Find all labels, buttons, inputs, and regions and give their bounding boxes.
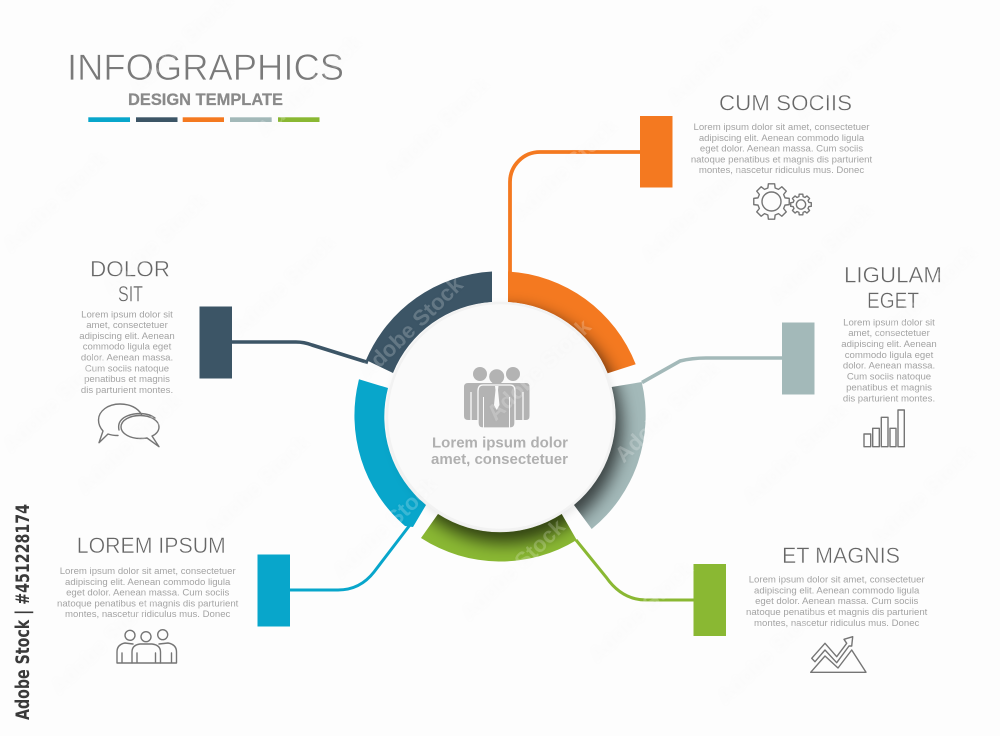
connector: slate (642, 358, 784, 382)
watermark pattern: Adobe Stock (610, 355, 724, 467)
centre text: Lorem ipsum dolor (432, 436, 568, 452)
text block: adipiscing elit. Aenean (79, 331, 175, 342)
watermark pattern: Adobe Stock (738, 397, 852, 509)
panel: lorem ipsum (57, 533, 239, 663)
watermark pattern: Adobe Stock (482, 313, 596, 425)
ring segment: dark (366, 272, 492, 373)
ring segment: orange (508, 272, 636, 373)
text block: Cum sociis natoque (847, 372, 931, 383)
watermark pattern: Adobe Stock (252, 29, 366, 141)
watermark pattern: Adobe Stock (72, 387, 186, 499)
heading: SIT (118, 282, 143, 307)
text block: penatibus et magnis (84, 374, 170, 385)
ring segment: blue (354, 379, 426, 527)
watermark pattern: Adobe Stock (712, 597, 826, 709)
icon: bar chart (864, 410, 904, 447)
text block: adipiscing elit. Aenean commodo ligula (754, 585, 920, 596)
text block (691, 122, 872, 176)
circle shadow on segments (387, 308, 623, 544)
text block: Lorem ipsum dolor sit amet, consectetuer (749, 574, 925, 586)
text block: Lorem ipsum dolor sit amet, consectetuer (60, 566, 236, 577)
watermark pattern: Adobe Stock (662, 0, 776, 110)
panel tab: orange (640, 116, 672, 188)
text block: dolor. Aenean massa. (81, 352, 173, 364)
panel: et magnis (746, 543, 928, 672)
heading: CUM SOCIIS (719, 91, 852, 116)
icon: team (117, 630, 176, 663)
ring segment: green (421, 514, 577, 562)
text block: amet, consectetuer (86, 320, 169, 331)
text block: eget dolor. Aenean massa. Cum sociis (700, 144, 863, 154)
text block: adipiscing elit. Aenean commodo ligula (65, 577, 231, 588)
watermark pattern: Adobe Stock (790, 13, 904, 125)
heading: LIGULAM (844, 263, 942, 288)
text block: Lorem ipsum dolor sit amet, consectetuer (694, 122, 870, 133)
panel: dolor sit (79, 257, 175, 447)
icon: mountain growth arrow (811, 637, 866, 672)
watermark pattern: Adobe Stock (636, 155, 750, 267)
icon: gears (754, 184, 811, 219)
heading (844, 263, 942, 313)
text block: Lorem ipsum dolor sit (81, 309, 173, 320)
watermark pattern: Adobe Stock (0, 145, 112, 257)
watermark pattern: Adobe Stock (456, 513, 570, 625)
icon: speech bubbles (98, 404, 159, 447)
text block: montes, nascetur ridiculus mus. Donec (65, 609, 231, 620)
text block: eget dolor. Aenean massa. Cum sociis (66, 588, 229, 599)
text block (841, 317, 937, 404)
stock id label: Adobe Stock | #451228174 (13, 504, 34, 720)
text block: dolor. Aenean massa. (843, 361, 935, 372)
text block: commodo ligula eget (83, 342, 172, 353)
heading: DOLOR (90, 257, 170, 282)
text block: eget dolor. Aenean massa. Cum sociis (755, 596, 918, 607)
text block: amet, consectetuer (848, 328, 931, 339)
text block: commodo ligula eget (845, 350, 934, 361)
icon: business people (464, 367, 530, 428)
colour key bars (88, 117, 320, 122)
heading: ET MAGNIS (782, 543, 900, 568)
panel tab: blue (258, 554, 290, 626)
centre text: amet, consectetuer (431, 452, 568, 468)
text block: dis parturient montes. (843, 393, 935, 404)
text block: montes, nascetur ridiculus mus. Donec (754, 618, 920, 629)
panel: cum sociis (691, 91, 872, 219)
centre circle (387, 303, 614, 530)
centre text (431, 436, 568, 468)
watermark pattern: Adobe Stock (226, 229, 340, 341)
connector: green (576, 540, 695, 600)
text block: natoque penatibus et magnis dis parturient (57, 598, 239, 609)
text block (57, 566, 239, 620)
text block: natoque penatibus et magnis dis parturient (746, 607, 928, 618)
watermark pattern: Adobe Stock (868, 239, 982, 351)
connector: blue (288, 517, 416, 590)
watermark pattern: Adobe Stock (764, 197, 878, 309)
circle soft shadow (387, 305, 617, 535)
panel tab: green (694, 564, 726, 636)
text block: Cum sociis natoque (85, 363, 169, 374)
connector: orange (510, 152, 642, 275)
connector: dark (230, 342, 368, 362)
text block: adipiscing elit. Aenean commodo ligula (699, 133, 865, 144)
watermark pattern: Adobe Stock (328, 471, 442, 583)
text block: dis parturient montes. (81, 385, 173, 396)
panel tab: slate (782, 322, 814, 394)
panel tab: dark (200, 306, 232, 378)
watermark pattern: Adobe Stock (584, 555, 698, 667)
watermark pattern: Adobe Stock (354, 271, 468, 383)
panel: ligulam eget (841, 263, 942, 447)
text block: penatibus et magnis (846, 382, 932, 393)
ring segment: slate (574, 382, 646, 529)
text block: Lorem ipsum dolor sit (843, 317, 935, 328)
heading (90, 257, 170, 307)
subtitle: DESIGN TEMPLATE (128, 90, 283, 109)
title: INFOGRAPHICS (67, 47, 344, 88)
text block: natoque penatibus et magnis dis parturient (691, 154, 872, 165)
text block (746, 574, 928, 629)
text block (79, 309, 175, 396)
watermark pattern: Adobe Stock (200, 429, 314, 541)
watermark pattern: Adobe Stock (866, 439, 980, 551)
text block: montes, nascetur ridiculus mus. Donec (699, 165, 864, 176)
text block: adipiscing elit. Aenean (841, 339, 937, 350)
watermark pattern: Adobe Stock (508, 113, 622, 225)
heading: EGET (867, 288, 919, 313)
watermark pattern: Adobe Stock (98, 187, 212, 299)
watermark pattern: Adobe Stock (380, 71, 494, 183)
heading: LOREM IPSUM (77, 533, 226, 558)
watermark pattern: Adobe Stock (0, 345, 112, 457)
watermark pattern: Adobe Stock (46, 587, 160, 699)
